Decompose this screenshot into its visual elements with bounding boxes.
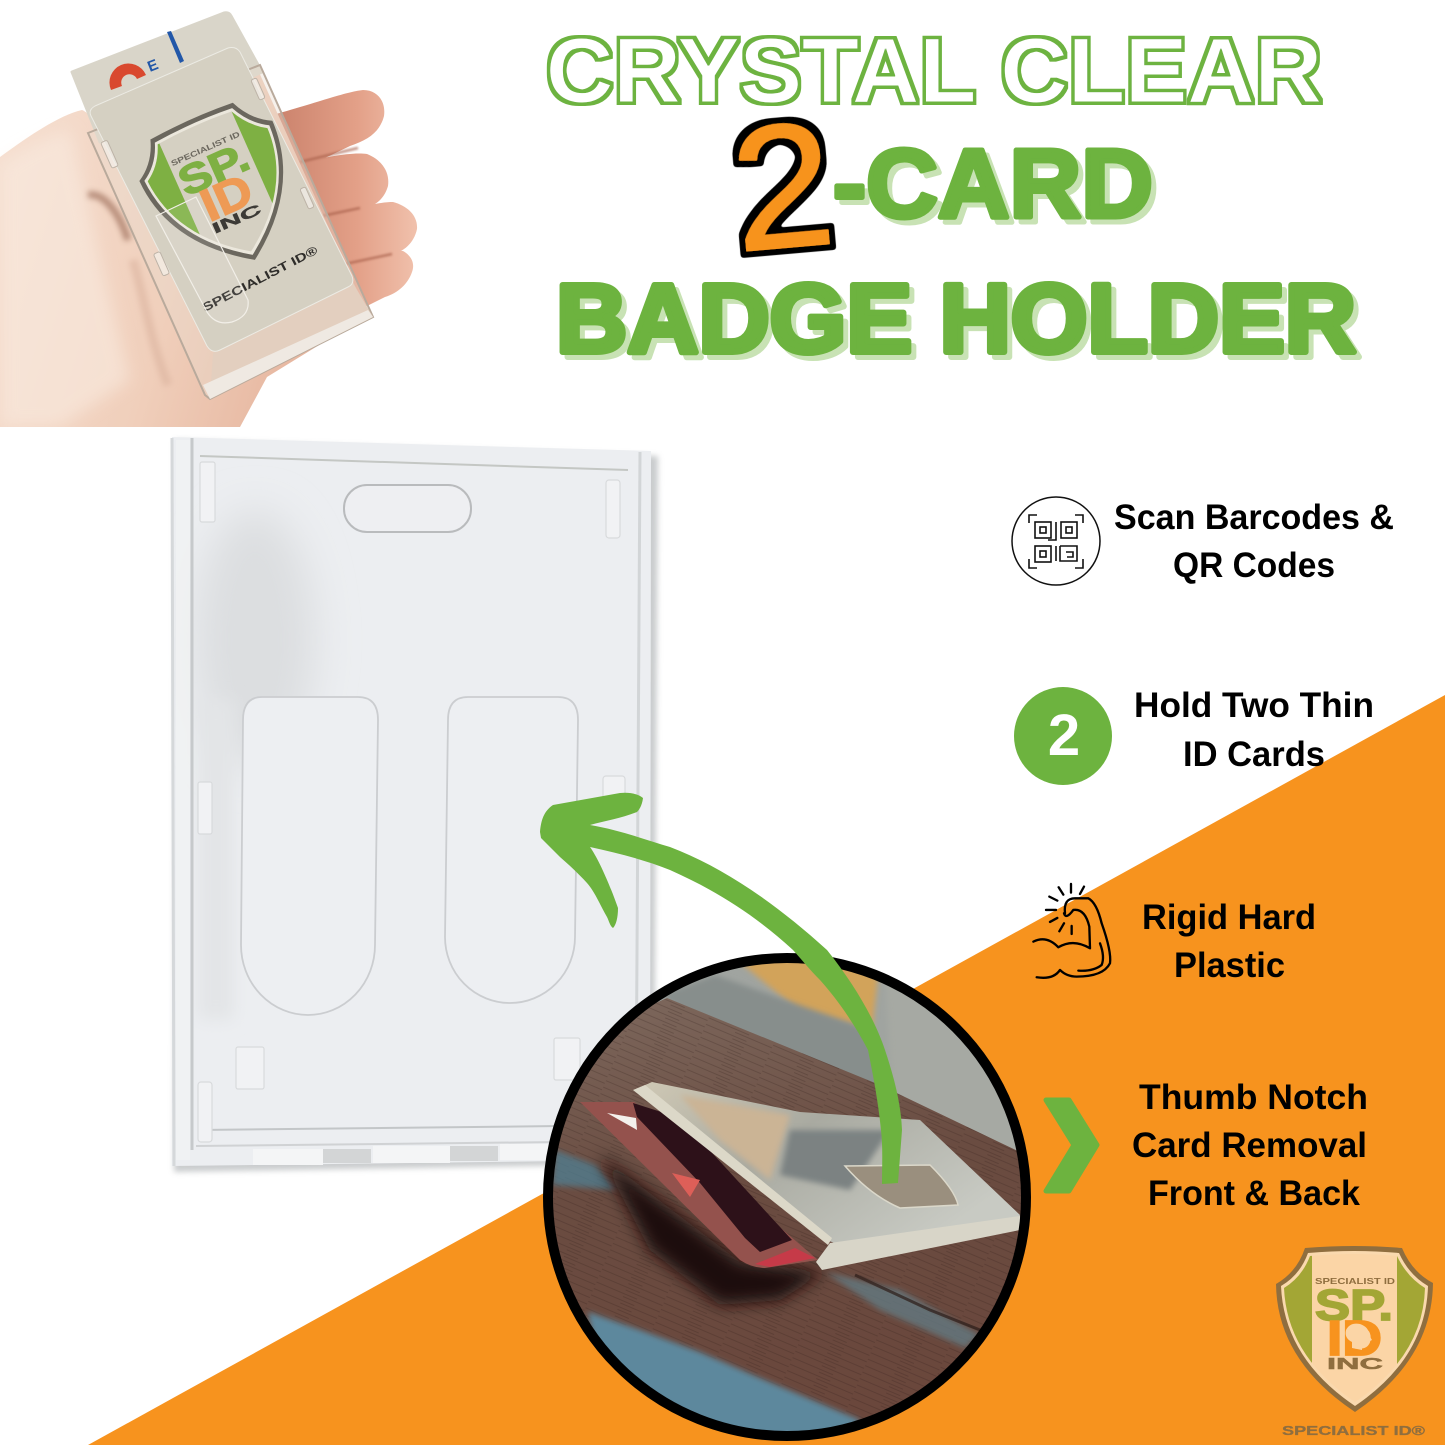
product: large clear badge holder xyxy=(172,437,658,1172)
right thumb window xyxy=(445,697,578,1003)
back card print: E xyxy=(145,56,161,76)
cast shadow xyxy=(600,1155,825,1305)
card highlights xyxy=(607,1113,815,1267)
blue paint left xyxy=(552,1150,617,1190)
title: crystal clear: CRYSTAL CLEAR xyxy=(546,20,1322,122)
palm xyxy=(0,70,368,427)
icon: green chevron xyxy=(1046,1100,1097,1191)
holder front rim xyxy=(816,1216,1020,1270)
feature: hold two thin ID cards xyxy=(1014,686,1374,785)
holder left edge xyxy=(633,1085,832,1245)
photo ring xyxy=(548,958,1026,1436)
text line 3: Front & Back xyxy=(1148,1174,1361,1213)
logo SP: SP. xyxy=(1315,1281,1393,1330)
holder body xyxy=(172,437,651,1166)
holder top face xyxy=(634,1082,1020,1243)
photo: holder with cards on wooden table xyxy=(549,955,1030,1445)
icon: QR code xyxy=(1012,497,1100,585)
text line 2: ID Cards xyxy=(1183,735,1325,774)
photo: hand holding badge holder xyxy=(0,13,417,427)
blue paint right xyxy=(825,1272,980,1348)
frame left band xyxy=(176,440,190,1160)
text line 2: QR Codes xyxy=(1173,546,1335,585)
text: Rigid Hard xyxy=(1142,898,1316,937)
logo small text: SPECIALIST ID xyxy=(1315,1276,1395,1286)
shield on card: ID xyxy=(193,164,260,231)
title: orange 2: 2 xyxy=(724,85,841,289)
left thumb window xyxy=(241,697,378,1015)
holder reflection xyxy=(680,1095,790,1180)
back card xyxy=(72,13,262,142)
slot punch xyxy=(344,485,471,532)
shield on card: SPECIALIST ID xyxy=(170,129,242,168)
corner tabs xyxy=(198,462,625,1142)
card dark stripe xyxy=(633,1103,792,1252)
shield inner line xyxy=(1281,1251,1428,1406)
text: Hold Two Thin xyxy=(1134,686,1374,725)
shield on card xyxy=(140,102,284,260)
holder body xyxy=(88,65,373,399)
fingers xyxy=(278,90,418,306)
icon: flexed arm xyxy=(1033,884,1110,978)
holder tabs xyxy=(101,78,314,276)
feature: rigid hard plastic xyxy=(1033,884,1316,985)
arrow: curved green arrow xyxy=(540,793,902,1184)
holder lower rim xyxy=(203,310,373,399)
blue paint bottom xyxy=(588,1312,860,1445)
front card xyxy=(90,48,353,351)
logo ID: ID xyxy=(1327,1312,1382,1366)
table crack xyxy=(855,1275,980,1330)
back card print xyxy=(109,31,184,90)
shield fill xyxy=(1284,1256,1425,1364)
photo backdrop xyxy=(657,966,896,1084)
shield on card: SP. xyxy=(171,134,256,205)
feature: thumb notch card removal xyxy=(1046,1078,1368,1213)
background: orange diagonal xyxy=(88,695,1445,1445)
shield outline xyxy=(1276,1246,1433,1412)
icon: number 2 badge: 2 xyxy=(1048,703,1080,768)
logo head icon xyxy=(1346,1324,1372,1350)
wood grain xyxy=(549,998,1026,1441)
holder shadow xyxy=(174,440,658,1172)
text: Scan Barcodes & xyxy=(1114,498,1394,537)
title: -card: -CARD xyxy=(833,129,1153,238)
holder print xyxy=(780,1130,890,1190)
logo: specialist ID shield xyxy=(1276,1246,1433,1436)
feature: scan barcodes and QR codes xyxy=(1012,497,1394,585)
card wordmark: SPECIALIST ID® xyxy=(200,243,320,315)
bottom rim segments xyxy=(253,1144,560,1165)
holder lower clear area xyxy=(210,283,373,399)
holder frame lines xyxy=(172,438,640,1166)
text: Thumb Notch xyxy=(1139,1078,1368,1117)
blurred window view xyxy=(742,963,880,1026)
shield on card: INC xyxy=(210,202,265,238)
table xyxy=(549,998,1026,1441)
title: badge holder: BADGE HOLDER xyxy=(556,264,1356,373)
icon: number 2 badge xyxy=(1014,687,1112,785)
wall panel xyxy=(885,970,1030,1170)
finger creases xyxy=(300,148,392,264)
window frame xyxy=(664,974,874,1082)
logo INC: INC xyxy=(1327,1356,1384,1373)
holder thumb notch xyxy=(845,1165,958,1208)
thumb notch xyxy=(156,197,248,323)
text line 2: Card Removal xyxy=(1132,1126,1367,1165)
logo wordmark: SPECIALIST ID® xyxy=(1282,1423,1426,1438)
red card xyxy=(580,1102,818,1268)
text line 2: Plastic xyxy=(1174,946,1285,985)
holder shading xyxy=(195,510,315,1020)
